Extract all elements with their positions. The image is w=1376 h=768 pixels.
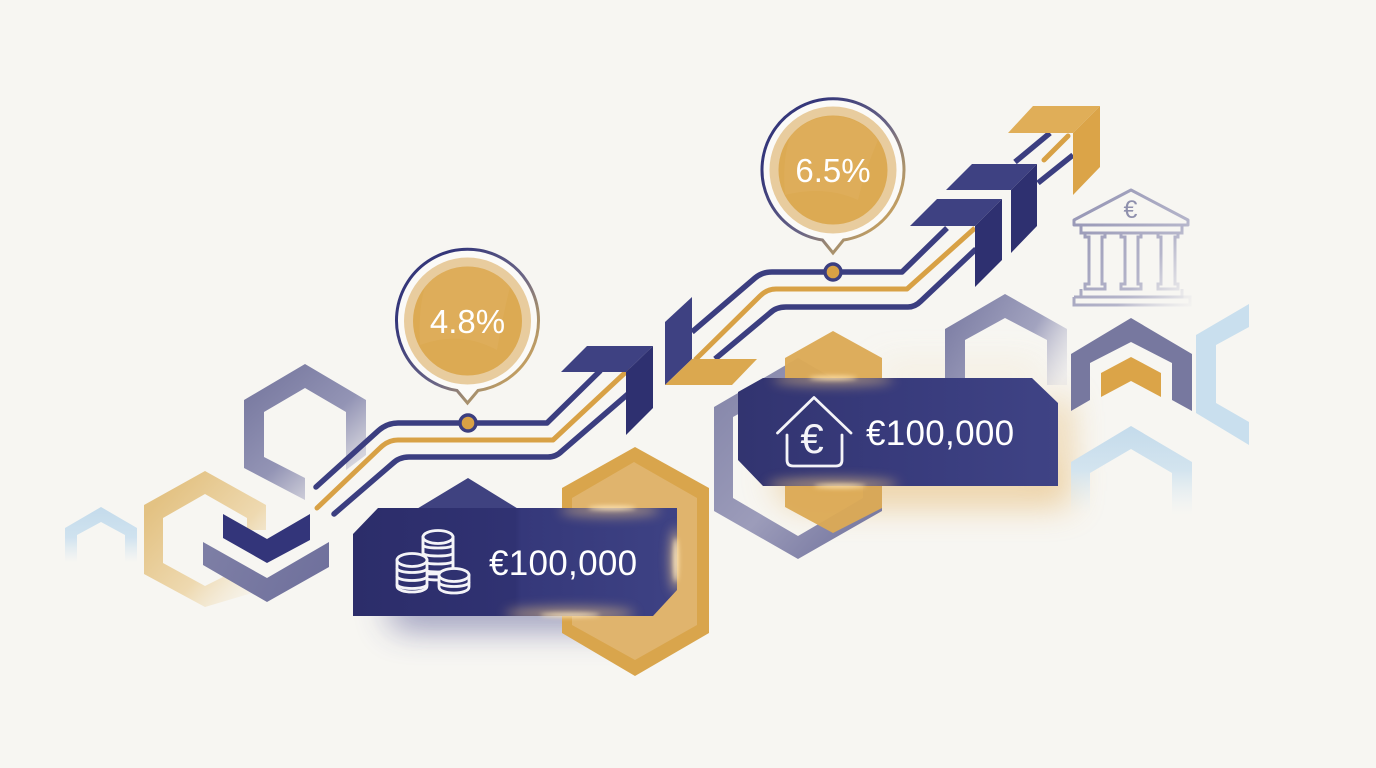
arrow head: gold [1008, 106, 1100, 195]
hexagon: faded blue small [65, 507, 137, 562]
hexagon: large grey behind card 2 [714, 358, 882, 559]
growth path: segment 3 [1015, 133, 1073, 183]
hexagon: light blue faded [1071, 426, 1192, 515]
card glows [505, 504, 683, 620]
chevron: navy [223, 514, 310, 563]
hexagon: grey arch with gold chevron [1071, 318, 1192, 411]
euro mark on bank: € [1124, 196, 1138, 224]
growth path: segment 1 [316, 370, 628, 514]
hexagon: navy peak behind card 1 [415, 478, 520, 510]
hexagon: light blue open [1196, 304, 1249, 445]
icon: house with euro: € [800, 415, 824, 462]
reversed arrow head [665, 297, 757, 385]
infographic canvas [65, 97, 1249, 676]
marker dot 2 [825, 264, 841, 280]
icon: house with euro [778, 398, 851, 466]
hexagon: gold behind card 2 [785, 331, 882, 533]
chevron: grey [203, 542, 329, 602]
hexagon: gold behind card 1 [562, 447, 709, 676]
amount: €100,000 [866, 414, 1014, 453]
card: €100,000 with house [738, 373, 1058, 491]
arrow head 2 [910, 199, 1002, 287]
marker dot 1 [460, 415, 476, 431]
icon: bank with euro [1074, 190, 1190, 305]
hexagon: grey outline [244, 364, 366, 500]
bubble: 4.8% [396, 249, 538, 403]
card glows [768, 373, 898, 491]
bubble: 6.5% [762, 99, 904, 253]
arrow head 1 [561, 346, 653, 435]
growth path: segment 2 [692, 228, 976, 360]
amount: €100,000 [489, 544, 637, 583]
hexagon: gold outline [144, 471, 266, 607]
arrow head 3 [946, 164, 1037, 253]
card shadow: navy [385, 595, 640, 628]
card shadow: gold [770, 365, 1070, 505]
card: €100,000 with coins [353, 504, 683, 620]
icon: coin stacks [397, 530, 469, 593]
value: 4.8% [430, 303, 505, 340]
value: 6.5% [795, 152, 871, 189]
hexagon: grey upper right [945, 294, 1067, 385]
